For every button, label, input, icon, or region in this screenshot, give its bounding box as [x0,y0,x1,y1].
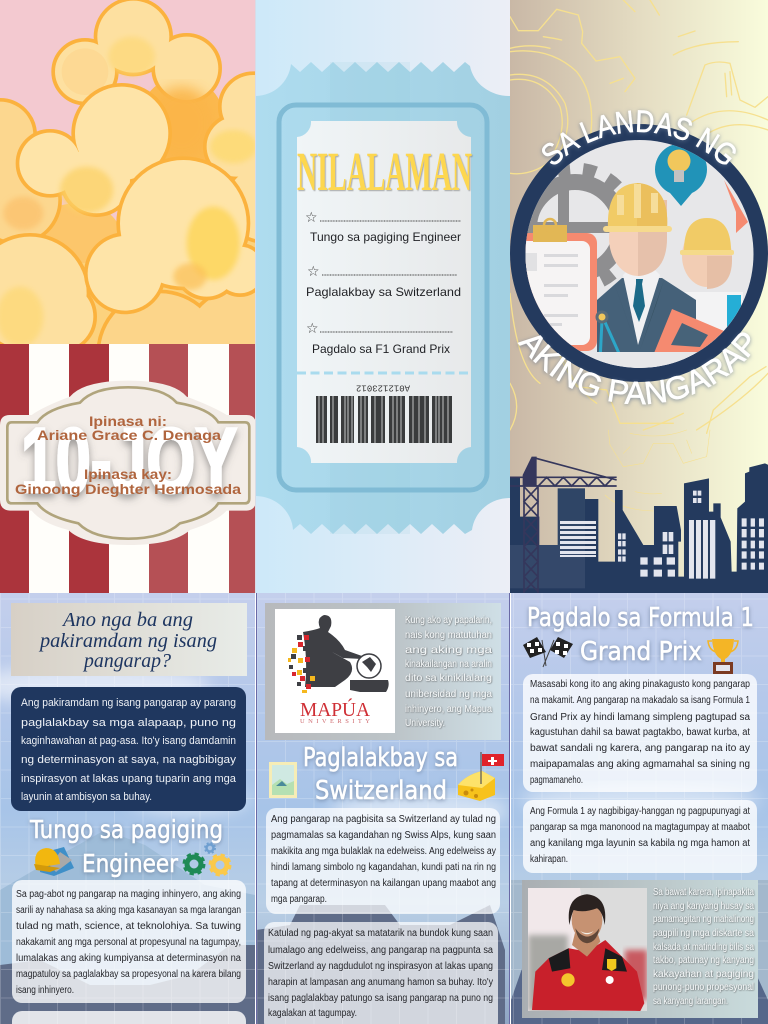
heading: what does a dream feel like: pakiramdam ng isang [38,630,217,652]
text block: Switzerland 1: hindi lamang simbolo ng kagandahan, kundi pati na rin ng [271,862,496,873]
seated figure [303,615,362,687]
gear [526,163,622,286]
big title 10-JOY: 10-JOY [21,410,237,512]
text box: clipped continuation [12,1011,246,1024]
ticket shape [256,62,510,534]
text box: Formula 1 intro [523,674,757,792]
panel: popcorn cover [0,0,255,344]
text block: Formula 1 intro [530,679,750,786]
icon: trophy [708,639,738,674]
text block: what a dream feels like: ng determinasyon at saya, na nagbibigay [21,754,237,766]
text block: Formula 1 intro: bawat sandali ng karera, ang pangarap na ito ay [530,743,750,754]
set square [654,309,724,353]
text box: Formula 1 second [523,800,757,873]
orange shape right [724,180,748,233]
text block: Switzerland 2: harapin at lampasan ang anumang hamon sa buhay. Ito'y [268,977,493,988]
heading: Tungo sa pagiging Engineer [29,815,223,878]
serial number: A012123012 [356,382,410,392]
panel: striped label cover [0,344,256,593]
contents list: ☆ [306,321,319,337]
text block: Switzerland 2: isang paglalakbay patungo sa isang pangarap na puno ng [268,993,493,1004]
dark intro box [11,687,246,811]
heading box [11,603,247,676]
icon: checkered flags [523,637,573,667]
text block: driver caption [653,887,754,1007]
Mapua University logo: MAPÚA [300,697,371,721]
photo box [522,880,758,1018]
text block: becoming an engineer: tulad ng math, science, at teknolohiya. Sa tuwing [16,921,241,932]
text block: driver caption: punong-puno propesyonal [653,982,754,993]
contents list: Tungo sa pagiging Engineer [310,230,461,244]
text block: Switzerland 1: Ang pangarap na pagbisita sa Switzerland ay tulad ng [271,814,496,825]
tower crane [510,458,617,593]
text block: Mapua University: dito sa kinikilalang [405,673,492,684]
clipboard [526,218,597,351]
text block: Mapua University: unibersidad ng mga [405,689,492,700]
text block: Switzerland 2: kagalakan at tagumpay. [268,1008,357,1019]
text block: becoming an engineer: Sa pag-abot ng pangarap na maging inhinyero, ang aking [16,889,241,900]
main engineer [597,183,696,352]
round illustration [505,124,768,382]
ornate label [0,381,256,545]
text block: driver caption: kakayahan at pagiging [653,969,754,980]
cover title arcs: SA LANDAS NG [540,108,738,167]
text block: Switzerland 1: pagmamalas sa kagandahan ng Swiss Alps, kung saan [271,830,496,841]
heading: Paglalakbay sa Switzerland: Switzerland [315,776,447,806]
contents list: Paglalakbay sa Switzerland [306,285,461,299]
text box: Switzerland 1 [266,808,500,914]
ticket card [297,121,471,463]
submitted by text: Ariane Grace C. Denaga [37,427,221,443]
panel: Formula 1 page background [511,593,768,1024]
text block: becoming an engineer: lumalakas ang aking kumpiyansa at determinasyon na [16,953,241,964]
small engineer [680,218,743,372]
heading: what does a dream feel like: Ano nga ba ang [61,609,193,631]
text block: Formula 1 intro: kagustuhan dahil sa bawat pagtakbo, bawat kurba, at [530,727,750,738]
globe and pedestal [357,654,381,678]
text block: driver caption: pagpili ng mga diskarte sa [653,928,754,939]
text block: Formula 1 intro: maipapamalas ang aking agmamahal sa sining ng [530,759,750,770]
text block: Switzerland 2 [268,928,493,1019]
text box: Switzerland 2 [264,922,498,1024]
text block: what a dream feels like: paglalakbay sa mga alapaap, puno ng [21,717,236,729]
heading: Tungo sa pagiging Engineer: Tungo sa pagiging [29,815,223,844]
text block: Switzerland 1: makikita ang mga bulaklak na edelweiss. Ang edelweiss ay [271,846,496,857]
heading: Nilalaman: NILALAMAN [297,141,472,202]
text block: Mapua University: Kung ako ay papalarin, [405,615,492,626]
text block: becoming an engineer: isang inhinyero. [16,985,74,996]
heading: what does a dream feel like: pangarap? [82,650,171,672]
contents list: ☆ [307,264,320,280]
text block: what a dream feels like: layunin at ambisyon sa buhay. [21,791,152,803]
text block: Mapua University: kinakailangan na aralin [405,659,492,670]
text block: Mapua University: inhinyero, ang Mapua [405,704,492,715]
text block: what a dream feels like: Ang pakiramdam ng isang pangarap ay parang [21,697,236,709]
text block: Formula 1 second [530,806,750,865]
text block: Switzerland 2: Katulad ng pag-akyat sa matatarik na bundok kung saan [268,928,493,939]
submitted by text: Ginoong Dieghter Hermosada [15,481,241,497]
submitted by text: Ipinasa ni: [89,414,167,429]
text block: Mapua University: ang aking mga [405,645,493,656]
heading: what does a dream feel like [38,609,217,672]
submitted by text [15,414,241,497]
text box: engineer [12,880,246,1003]
text block: becoming an engineer: sarili ay nahahasa sa aking mga kasanayan sa mga larangan [16,905,241,916]
compass [597,312,622,362]
icon: hard hat and blueprints [34,847,74,876]
text block: what a dream feels like: inspirasyon at lakas upang tuparin ang mga [21,773,237,785]
driver photo [528,888,647,1011]
icon: gears [184,843,230,874]
panel: cover with engineers [510,0,768,593]
contents list: ☆ [305,210,318,226]
pixels [288,635,315,693]
text block: Switzerland 1: mga pangarap. [271,894,327,905]
text block: Mapua University: nais kong matutuhan [405,630,492,641]
university box [265,603,501,740]
contents list: Pagdalo sa F1 Grand Prix [312,342,450,356]
panel: table of contents ticket [256,0,511,593]
text block: Mapua University: University. [405,718,445,729]
panel: engineer page background [0,593,255,1024]
text block: what a dream feels like [21,697,237,803]
text block: Formula 1 second: kahirapan. [530,854,568,865]
text block: Formula 1 intro: pagmamaneho. [530,775,583,786]
heading: Paglalakbay sa Switzerland [303,743,458,806]
text block: Switzerland 2: lumalago ang edelweiss, ang pangarap na pagpunta sa [268,945,493,956]
text block: Switzerland 2: Switzerland ay nagdudulot ng inspirasyon at lakas upang [268,961,493,972]
barcode [316,396,452,443]
Mapua University logo [275,609,395,733]
light bulb bubble [655,143,707,206]
background gears [510,0,768,433]
text block: Mapua University [405,615,493,729]
text block: becoming an engineer: nakakamit ang mga personal at propesyunal na tagumpay, [16,937,241,948]
text block: becoming an engineer [16,889,241,996]
city skyline [510,457,768,593]
text block: becoming an engineer: magpatuloy sa paglalakbay sa propesyonal na karera bilang [16,969,241,980]
submitted by text: Ipinasa kay: [84,467,172,482]
text block: what a dream feels like: kaginhawahan at pag-asa. Ito'y isang damdamin [21,735,236,747]
Mapua University logo: UNIVERSITY [300,718,370,725]
contents list [305,210,461,356]
text block: Switzerland 1 [271,814,496,905]
inner frame [279,105,487,490]
text block: Formula 1 second: ang kanilang mga layunin sa kabila ng mga hamon at [530,838,750,849]
text block: Switzerland 1: tapang at determinasyon na kailangan upang maabot ang [271,878,496,889]
heading: Pagdalo sa Formula 1 Grand Prix: Grand Prix [580,637,702,667]
text block: driver caption: sa kanyang larangan. [653,996,728,1007]
cover title arcs [516,108,753,408]
cover title arcs: AKING PANGARAP [516,330,753,408]
icon: cheese and Swiss flag [458,752,504,801]
panel: Switzerland page background [255,593,511,1024]
text block: Formula 1 intro: Grand Prix ay hindi lamang simpleng pagtupad sa [530,712,750,723]
heading: Paglalakbay sa Switzerland: Paglalakbay sa [303,743,458,773]
heading: Tungo sa pagiging Engineer: Engineer [82,849,179,878]
heading: Pagdalo sa Formula 1 Grand Prix [527,603,754,667]
icon: postage stamp [269,762,297,798]
